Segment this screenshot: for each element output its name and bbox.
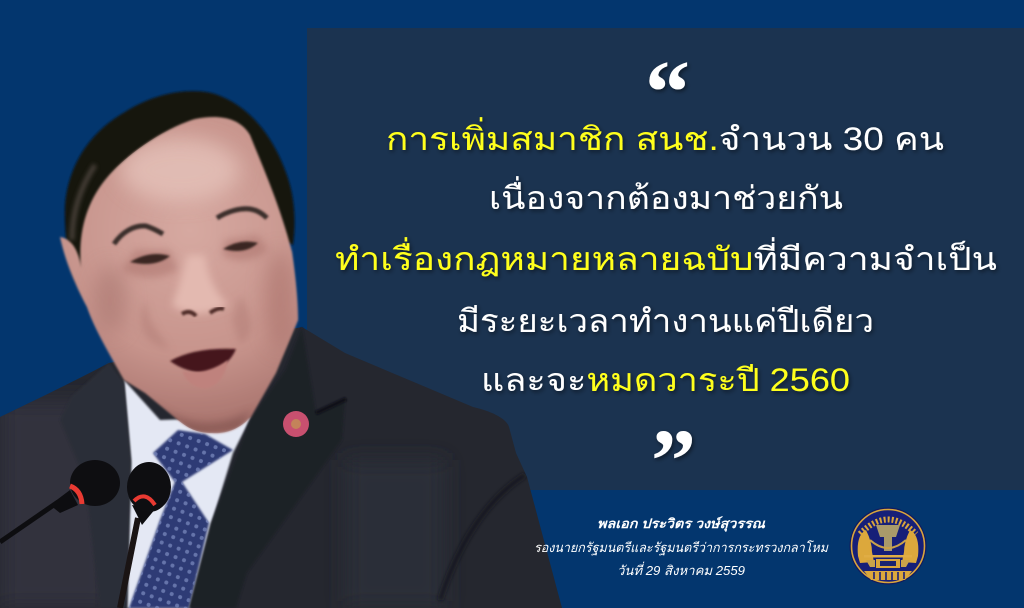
right lapel: [189, 327, 345, 608]
line 3: ทำเรื่องกฎหมายหลายฉบับ ที่มีความจำเป็น: [335, 237, 997, 277]
portrait: speaking man at microphones: [0, 91, 570, 608]
mouth: [170, 349, 236, 373]
emblem crown band: [860, 520, 916, 534]
face: [60, 117, 298, 436]
grey temple hair: [72, 165, 95, 240]
emblem base: [864, 571, 912, 580]
line 2: เนื่องจากต้องมาช่วยกัน: [489, 176, 843, 216]
suit: [0, 320, 570, 608]
quote text: [335, 117, 997, 398]
line 1: การเพิ่มสมาชิก สนช. จำนวน 30 คน: [386, 117, 944, 157]
lapel pin: [283, 411, 309, 437]
speaker name: พลเอก ประวิตร วงษ์สุวรรณ: [597, 516, 766, 532]
left microphone: [0, 460, 120, 542]
line 5: และจะ หมดวาระปี 2560: [481, 362, 850, 398]
line 4: มีระยะเวลาทำงานแค่ปีเดียว: [457, 303, 874, 339]
lower lip and teeth: [182, 360, 228, 389]
emblem platform: [864, 555, 912, 558]
nose bridge and tip: [172, 255, 228, 314]
date: วันที่ 29 สิงหาคม 2559: [617, 561, 745, 578]
eyes: [130, 241, 258, 264]
right microphone: [120, 462, 171, 608]
speaker title: รองนายกรัฐมนตรีและรัฐมนตรีว่าการกระทรวงกลาโหม: [534, 540, 829, 556]
emblem urn: [876, 525, 900, 551]
emblem lions: [858, 530, 918, 563]
panel: quote background: [307, 28, 1024, 490]
opening quote mark: “: [645, 43, 690, 142]
shirt: [124, 380, 251, 608]
caption: [534, 516, 829, 578]
lapel notch shadow: [316, 399, 346, 413]
nostrils: [182, 308, 224, 316]
icon: Ministry of Defence emblem: [850, 508, 926, 584]
left lapel: [60, 363, 131, 608]
tie: [129, 430, 233, 608]
hair: [65, 91, 295, 285]
closing quote mark: ”: [651, 412, 696, 511]
eyebrows: [114, 209, 267, 244]
